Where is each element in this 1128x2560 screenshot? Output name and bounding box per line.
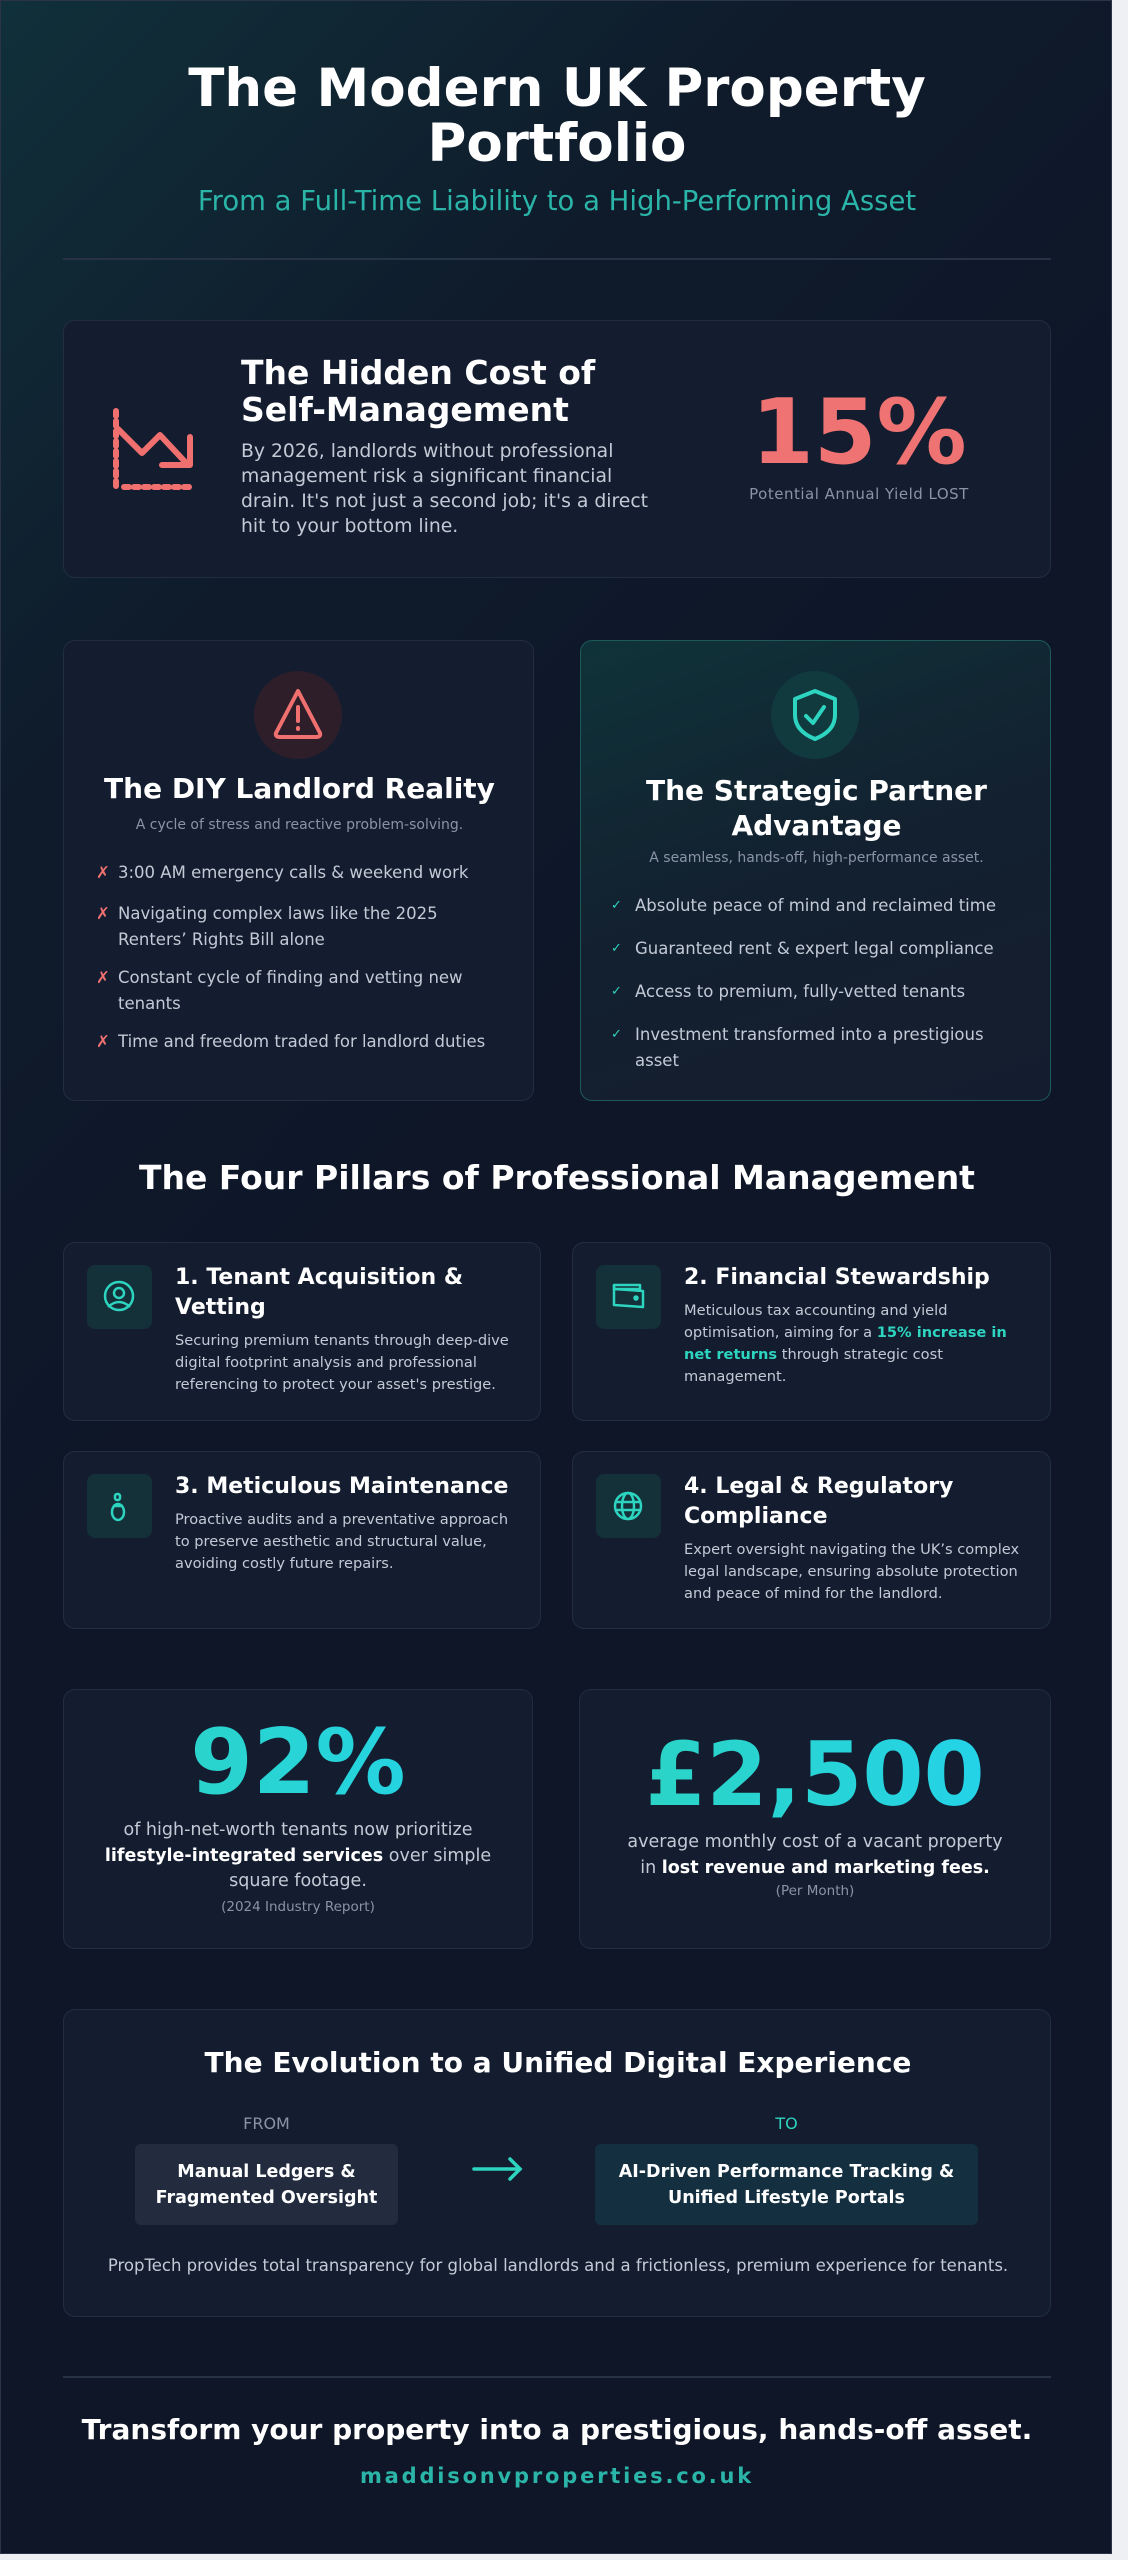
panel: DIY landlord xyxy=(63,640,534,1101)
website url: maddisonvproperties.co.uk xyxy=(360,2464,754,2488)
pillar 4: Compliance xyxy=(684,1504,827,1529)
icon: maintenance xyxy=(87,1474,152,1538)
panel: strategic partner xyxy=(580,640,1051,1101)
pillar 3: Proactive audits and a preventative approach to preserve aesthetic and structural value, avoiding costly future repairs. xyxy=(175,1511,508,1572)
stat card: £2,500: average monthly cost of a vacant property in lost revenue and marketing fees. xyxy=(627,1832,1003,1878)
from box xyxy=(135,2144,398,2225)
icon: warning xyxy=(254,671,342,759)
pillar 2 xyxy=(572,1242,1051,1421)
heading: The DIY Landlord Reality xyxy=(104,772,495,805)
list: pains: ✗ xyxy=(96,863,110,882)
footnote: PropTech provides total transparency for global landlords and a frictionless, premium experience for tenants. xyxy=(108,2256,1008,2275)
pillar 1 xyxy=(63,1242,541,1421)
pillar 2: Meticulous tax accounting and yield optimisation, aiming for a 15% increase in net returns through strategic cost management. xyxy=(684,1302,1007,1385)
list: benefits: Absolute peace of mind and reclaimed time xyxy=(635,896,996,915)
stat card: 92%: 92% xyxy=(190,1710,406,1815)
stat card: 92%: of high-net-worth tenants now prioritize lifestyle-integrated services over simple square footage. xyxy=(105,1820,491,1891)
pillar 4 xyxy=(572,1451,1051,1629)
list: pains: ✗ xyxy=(96,904,110,923)
list: pains: Constant cycle of finding and vetting new tenants xyxy=(118,968,463,1013)
stat card: £2,500 xyxy=(579,1689,1051,1949)
to label: TO xyxy=(775,2114,798,2133)
panel: hidden cost xyxy=(63,320,1051,578)
to box: Unified Lifestyle Portals xyxy=(668,2188,905,2208)
pillar 4: Expert oversight navigating the UK’s complex legal landscape, ensuring absolute protection and peace of mind for the landlord. xyxy=(684,1541,1019,1602)
to box xyxy=(595,2144,978,2225)
from box: Manual Ledgers & xyxy=(177,2162,356,2182)
title: The Modern UK Property xyxy=(188,58,926,119)
stat card: £2,500: £2,500 xyxy=(645,1723,985,1826)
list: benefits xyxy=(611,896,996,1070)
stat: 15%: 15% xyxy=(751,380,967,485)
list: benefits: Guaranteed rent & expert legal compliance xyxy=(635,939,994,958)
heading: Advantage xyxy=(731,809,902,842)
icon: declining chart xyxy=(113,408,193,490)
list: benefits: ✓ xyxy=(611,984,622,999)
subheading: A cycle of stress and reactive problem-solving. xyxy=(136,817,463,833)
list: pains: ✗ xyxy=(96,1032,110,1051)
pillar 1: Securing premium tenants through deep-dive digital footprint analysis and professional referencing to protect your asset's prestige. xyxy=(175,1332,509,1393)
list: pains: 3:00 AM emergency calls & weekend work xyxy=(118,863,468,882)
icon: user xyxy=(87,1265,152,1329)
from box: Fragmented Oversight xyxy=(156,2188,377,2208)
heading: The Strategic Partner xyxy=(646,774,987,807)
heading: Self-Management xyxy=(241,390,569,429)
icon: shield xyxy=(771,671,859,759)
stat card: £2,500: (Per Month) xyxy=(776,1883,854,1899)
heading: The Hidden Cost of xyxy=(241,353,595,392)
call to action: Transform your property into a prestigious, hands-off asset. xyxy=(82,2413,1032,2446)
pillar 1: Vetting xyxy=(175,1295,266,1320)
pillar 4: 4. Legal & Regulatory xyxy=(684,1474,953,1499)
arrow xyxy=(472,2157,522,2181)
to box: AI-Driven Performance Tracking & xyxy=(619,2162,954,2182)
stat card: 92% xyxy=(63,1689,533,1949)
pillar 2: 2. Financial Stewardship xyxy=(684,1265,990,1290)
title xyxy=(188,58,926,174)
panel: evolution xyxy=(63,2009,1051,2317)
section heading: four pillars: The Four Pillars of Professional Management xyxy=(139,1158,975,1197)
body text: By 2026, landlords without professional management risk a significant financial drain. It's not just a second job; it's a direct hit to your bottom line. xyxy=(241,441,648,537)
list: benefits: Access to premium, fully-vetted tenants xyxy=(635,982,965,1001)
list: benefits: ✓ xyxy=(611,898,622,913)
heading xyxy=(646,774,987,842)
stat: 15%: Potential Annual Yield LOST xyxy=(749,485,969,503)
list: benefits: Investment transformed into a prestigious asset xyxy=(635,1025,984,1070)
list: pains xyxy=(96,863,485,1051)
pillar 1: 1. Tenant Acquisition & xyxy=(175,1265,463,1290)
title: Portfolio xyxy=(428,113,686,174)
icon: wallet xyxy=(596,1265,661,1329)
subtitle: From a Full-Time Liability to a High-Performing Asset xyxy=(198,185,916,217)
pillar 3 xyxy=(63,1451,541,1629)
list: pains: Time and freedom traded for landlord duties xyxy=(118,1032,485,1051)
subheading: A seamless, hands-off, high-performance asset. xyxy=(649,850,984,866)
list: benefits: ✓ xyxy=(611,1027,622,1042)
list: pains: ✗ xyxy=(96,968,110,987)
icon: globe xyxy=(596,1474,661,1538)
list: pains: Navigating complex laws like the 2025 Renters’ Rights Bill alone xyxy=(118,904,438,949)
list: benefits: ✓ xyxy=(611,941,622,956)
from label: FROM xyxy=(243,2114,290,2133)
pillar 3: 3. Meticulous Maintenance xyxy=(175,1474,508,1499)
stat card: 92%: (2024 Industry Report) xyxy=(221,1898,375,1914)
heading xyxy=(241,353,596,429)
heading: The Evolution to a Unified Digital Experience xyxy=(205,2046,911,2079)
